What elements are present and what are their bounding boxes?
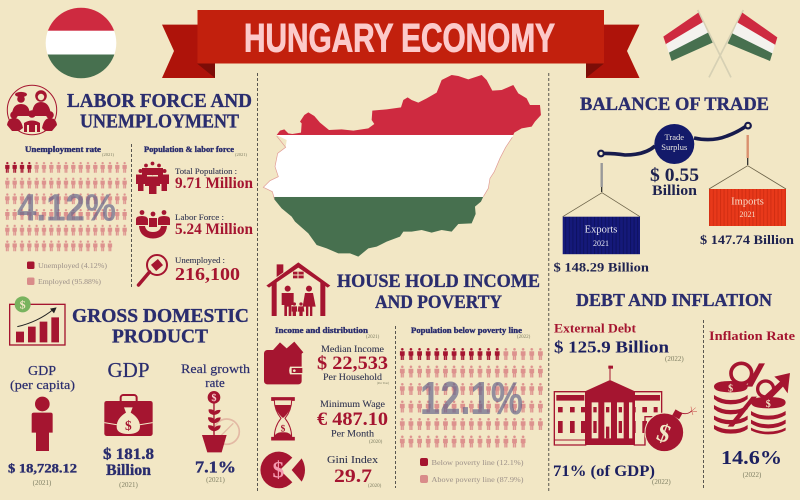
badge: trade surplus <box>654 124 694 164</box>
heading: product: PRODUCT <box>112 326 208 348</box>
label: population below poverty line: Population below poverty line <box>411 326 522 335</box>
year: (2022) <box>743 471 762 479</box>
icon: round Hungarian flag <box>45 7 117 78</box>
year: (2021) <box>33 479 52 487</box>
chart: unemployment pictogram <box>4 160 128 254</box>
year: (2022) <box>517 335 531 340</box>
container: imports: 2021 <box>740 210 756 219</box>
label: per capita: (per capita) <box>10 378 75 392</box>
panel: debt and inflation <box>553 290 796 486</box>
icon: hourglass: $ <box>281 424 286 435</box>
container: exports: 2021 <box>593 239 609 248</box>
icon: government building with bomb: $ <box>653 418 675 449</box>
panel: household income and poverty <box>260 262 545 489</box>
map of Hungary <box>255 70 550 260</box>
legend: unemployed: Unemployed (4.12%) <box>38 262 108 270</box>
panel: labor force and unemployment <box>4 85 253 286</box>
badge: trade surplus: Surplus <box>661 142 687 152</box>
value: GDP per capita: $ 18,728.12 <box>8 462 77 476</box>
container: exports: Exports <box>585 225 617 236</box>
icon: Gini pie <box>260 452 305 488</box>
icon: briefcase with money bag: $ <box>125 418 132 433</box>
text: Gini index: Gini Index <box>327 454 379 466</box>
label: external debt: External Debt <box>554 322 637 336</box>
year: (2021) <box>235 152 247 157</box>
value: surplus: $ 0.55 <box>650 165 699 186</box>
legend: employed: Employed (95.88%) <box>38 278 102 286</box>
icon: labor force <box>136 210 170 238</box>
heading: debt and inflation: DEBT AND INFLATION <box>576 290 772 310</box>
legend: below poverty line: Below poverty line (12.1%) <box>432 459 524 467</box>
icon: house with family <box>266 262 330 316</box>
label: unemployment rate: Unemployment rate <box>25 145 101 154</box>
icon: plant growth <box>202 391 239 452</box>
diagram: balance beam <box>598 123 751 192</box>
icon: hourglass <box>272 398 294 440</box>
icon: growth chart: $ <box>20 298 26 312</box>
year: (2020) <box>369 440 383 445</box>
value unit: billion: Billion <box>652 183 698 199</box>
year: (2021) <box>102 152 114 157</box>
year: (2021) <box>366 335 380 340</box>
legend: below poverty line <box>420 458 524 467</box>
badge: trade surplus: Trade <box>665 132 684 142</box>
heading: gross domestic: GROSS DOMESTIC <box>72 306 249 327</box>
container: imports: Imports <box>731 197 764 208</box>
panel: balance of trade <box>554 95 794 275</box>
heading: balance of trade: BALANCE OF TRADE <box>580 95 769 115</box>
heading: household income: HOUSE HOLD INCOME <box>337 272 540 292</box>
icon: government building with bomb <box>554 366 697 452</box>
icon: person <box>32 397 53 451</box>
text: labor force: Labor Force : <box>175 213 224 222</box>
chart: poverty pictogram <box>398 346 545 451</box>
value: unemployment rate: 4.12% <box>17 188 116 230</box>
label: income and distribution: Income and distribution <box>275 326 369 335</box>
label: rate: rate <box>205 375 225 390</box>
year: (2022) <box>652 478 671 486</box>
label: GDP per capita: GDP <box>28 364 56 379</box>
year: (2022) <box>665 355 684 363</box>
icon: briefcase with money bag <box>104 395 153 436</box>
icon: Gini pie: $ <box>272 458 284 484</box>
title banner <box>162 10 640 78</box>
value: debt to GDP: 71% (of GDP) <box>553 463 655 480</box>
value: growth rate: 7.1% <box>195 458 236 477</box>
value: exports: $ 148.29 Billion <box>554 261 649 275</box>
icon: wallet <box>264 342 303 384</box>
label: real growth: Real growth <box>181 361 251 376</box>
legend: above poverty line: Above poverty line (87.9%) <box>432 476 524 484</box>
container: exports <box>563 193 640 254</box>
label: inflation rate: Inflation Rate <box>709 329 796 343</box>
label: GDP: GDP <box>107 358 150 382</box>
value: Gini index: 29.7 <box>334 466 373 487</box>
value: unemployed: 216,100 <box>175 264 240 284</box>
value: poverty rate: 12.1% <box>420 372 523 424</box>
value: total population: 9.71 Million <box>175 175 253 192</box>
year: (2021) <box>206 476 225 484</box>
container: imports <box>709 166 786 226</box>
value: GDP: $ 181.8 <box>103 446 154 463</box>
year: (2020) <box>368 484 382 489</box>
note: per year: (Per Year) <box>377 381 389 385</box>
value: inflation: 14.6% <box>721 447 782 469</box>
label: population and labor force: Population & labor force <box>144 145 234 154</box>
icon: workers <box>7 85 57 135</box>
text: per household: Per Household <box>323 372 383 382</box>
text: median income: Median Income <box>321 345 384 355</box>
value: minimum wage: € 487.10 <box>317 410 388 430</box>
icon: magnifier <box>138 255 167 285</box>
icon: population crowd <box>136 162 169 194</box>
value: median income: $ 22,533 <box>317 354 388 374</box>
value: imports: $ 147.74 Billion <box>700 233 794 247</box>
icon: inflation coins <box>714 363 790 434</box>
year: (2021) <box>119 481 138 489</box>
text: minimum wage: Minimum Wage <box>320 400 385 410</box>
heading: unemployment: UNEMPLOYMENT <box>80 112 239 133</box>
icon: inflation coins: $ <box>728 383 733 394</box>
icon: inflation coins: $ <box>766 399 771 410</box>
value: labor force: 5.24 Million <box>175 221 253 238</box>
icon: crossed flags <box>663 10 777 77</box>
text: unemployed: Unemployed : <box>175 256 225 265</box>
text: per month: Per Month <box>331 429 375 439</box>
icon: plant growth: $ <box>211 393 216 404</box>
title: HUNGARY ECONOMY <box>244 17 555 61</box>
value unit: billion: Billion <box>106 462 151 479</box>
heading: labor force: LABOR FORCE AND <box>67 91 252 112</box>
panel: gross domestic product <box>8 296 251 489</box>
icon: growth chart <box>10 296 65 345</box>
heading: and poverty: AND POVERTY <box>375 293 503 313</box>
value: external debt: $ 125.9 Billion <box>554 338 670 357</box>
text: total population: Total Population : <box>175 167 237 176</box>
legend: above poverty line <box>420 475 524 484</box>
